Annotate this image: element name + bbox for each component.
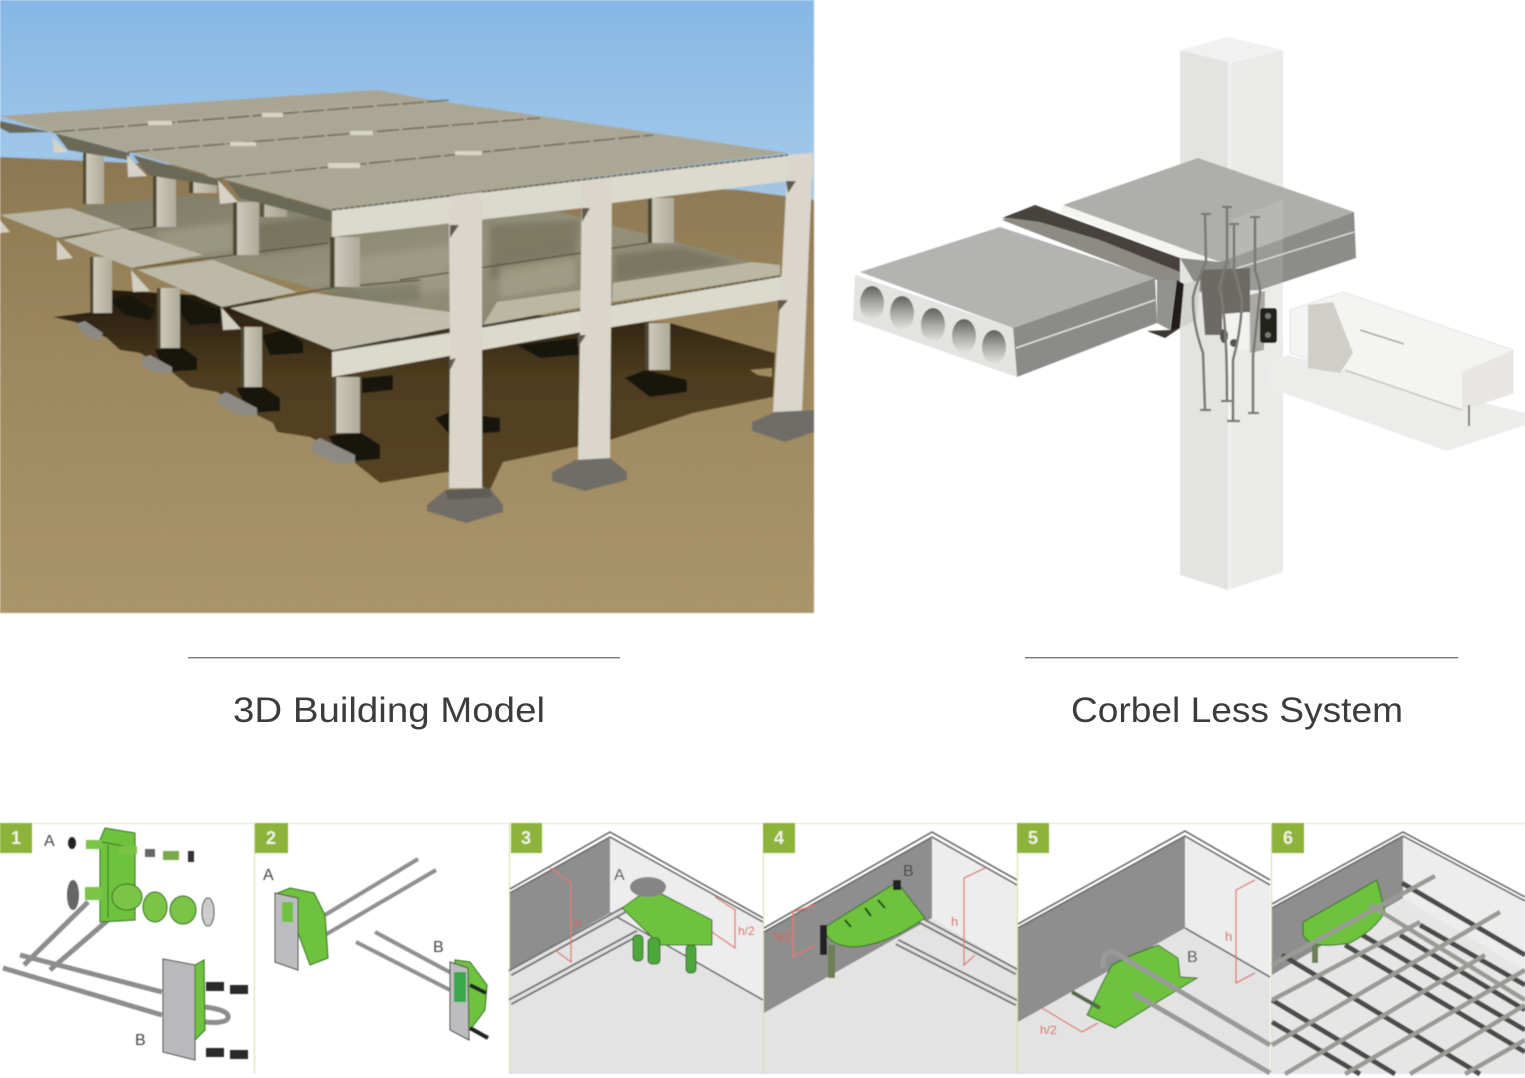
- anchor B: [452, 960, 487, 1030]
- panel: corbel less system illustration: [853, 37, 1525, 590]
- label h/2: h/2: [774, 930, 791, 944]
- label h: h: [1225, 929, 1232, 944]
- slab core holes: [860, 286, 1006, 364]
- badge 1: 1: [11, 828, 21, 848]
- roof slab underside shading: [0, 121, 332, 222]
- strip top edge: [0, 823, 1525, 824]
- badge 2: 2: [266, 828, 276, 848]
- lower hollow core slab: [853, 227, 1200, 377]
- roof slab: [0, 90, 788, 210]
- green hood anchor: [1087, 945, 1197, 1028]
- panel: 3D building model rendering: [0, 0, 814, 613]
- step 5: [1017, 823, 1270, 1074]
- green anchor: [1303, 880, 1385, 945]
- badge 1: [0, 823, 32, 853]
- sky: [0, 0, 814, 215]
- green anchor: [622, 888, 712, 945]
- formwork: [764, 918, 1017, 1074]
- formwork: [1018, 928, 1270, 1074]
- label h/2: h/2: [1040, 1023, 1057, 1037]
- rebars: [1103, 952, 1270, 1073]
- lit patch in shadow: [750, 368, 772, 377]
- label B: B: [1187, 949, 1198, 966]
- label B: B: [433, 939, 444, 956]
- caption: Corbel Less System: Corbel Less System: [1071, 691, 1403, 730]
- label A: A: [263, 867, 274, 884]
- rebar frame: [3, 902, 228, 1022]
- badge 5: 5: [1028, 828, 1038, 848]
- roof corbels: [52, 137, 238, 204]
- label B: B: [903, 863, 914, 880]
- label A: A: [44, 833, 55, 850]
- connector detail inset: [1270, 292, 1525, 451]
- rebars: [510, 910, 638, 1002]
- step 2: [255, 823, 488, 1040]
- column overlay: [1231, 200, 1283, 340]
- badge 3: 3: [521, 828, 531, 848]
- step 1: [0, 823, 248, 1060]
- badge 4: 4: [774, 828, 784, 848]
- parts row: [67, 837, 214, 926]
- red dimensions: [793, 868, 985, 965]
- upper hollow core slab: [1060, 158, 1356, 292]
- step 4: [763, 823, 1017, 1074]
- first floor slab strips: [0, 208, 780, 350]
- step 3: [510, 823, 763, 1074]
- roof panel joints: [148, 113, 482, 168]
- label h/2: h/2: [738, 924, 755, 938]
- red dimensions: [550, 868, 735, 962]
- formwork: [510, 913, 763, 1074]
- translucent column: [1180, 37, 1283, 590]
- bearing block: [1157, 280, 1177, 330]
- badge 5: [1017, 823, 1049, 853]
- rebars: [897, 920, 1017, 1003]
- first floor corbels: [0, 220, 241, 330]
- plate B: [163, 959, 195, 1060]
- badge 6: 6: [1283, 828, 1293, 848]
- anchor bars: [1193, 207, 1260, 421]
- badge 3: [511, 823, 542, 853]
- label B: B: [135, 1032, 146, 1049]
- green anchor A: [100, 828, 135, 922]
- caption: 3D Building Model: 3D Building Model: [233, 691, 545, 730]
- lower storey columns: [90, 257, 670, 433]
- dark joint band: [1002, 205, 1180, 285]
- label A: A: [614, 867, 625, 884]
- front columns: [449, 153, 813, 488]
- anchor A: [278, 888, 328, 965]
- badge 6: [1272, 823, 1304, 853]
- steel corbel connector: [1200, 268, 1277, 353]
- column haunches: [449, 181, 796, 372]
- rear footings: [110, 295, 687, 462]
- green half-round anchor: [820, 880, 925, 955]
- rebars A: [325, 859, 478, 1017]
- installation steps strip: [0, 823, 1525, 1074]
- roof perimeter beam: [332, 153, 813, 237]
- building shadow on ground: [53, 290, 775, 490]
- step 6: [1272, 823, 1525, 1074]
- dark rebar mesh: [1272, 883, 1525, 1074]
- divider right: [1025, 657, 1458, 658]
- front footings: [427, 410, 814, 523]
- label h: h: [574, 916, 581, 931]
- badge 4: [763, 823, 795, 853]
- formwork: [1272, 898, 1525, 1074]
- first floor slab surface: [57, 195, 753, 325]
- divider left: [188, 657, 620, 658]
- gray footing pads: [75, 321, 355, 463]
- first floor perimeter beam: [332, 272, 806, 377]
- light rebar mesh: [1272, 876, 1525, 1074]
- label h: h: [951, 914, 958, 929]
- upper storey columns: [83, 152, 674, 287]
- ground: [0, 157, 814, 613]
- red dimensions: [1042, 880, 1255, 1032]
- bolts: [206, 982, 248, 1059]
- badge 2: [255, 823, 288, 853]
